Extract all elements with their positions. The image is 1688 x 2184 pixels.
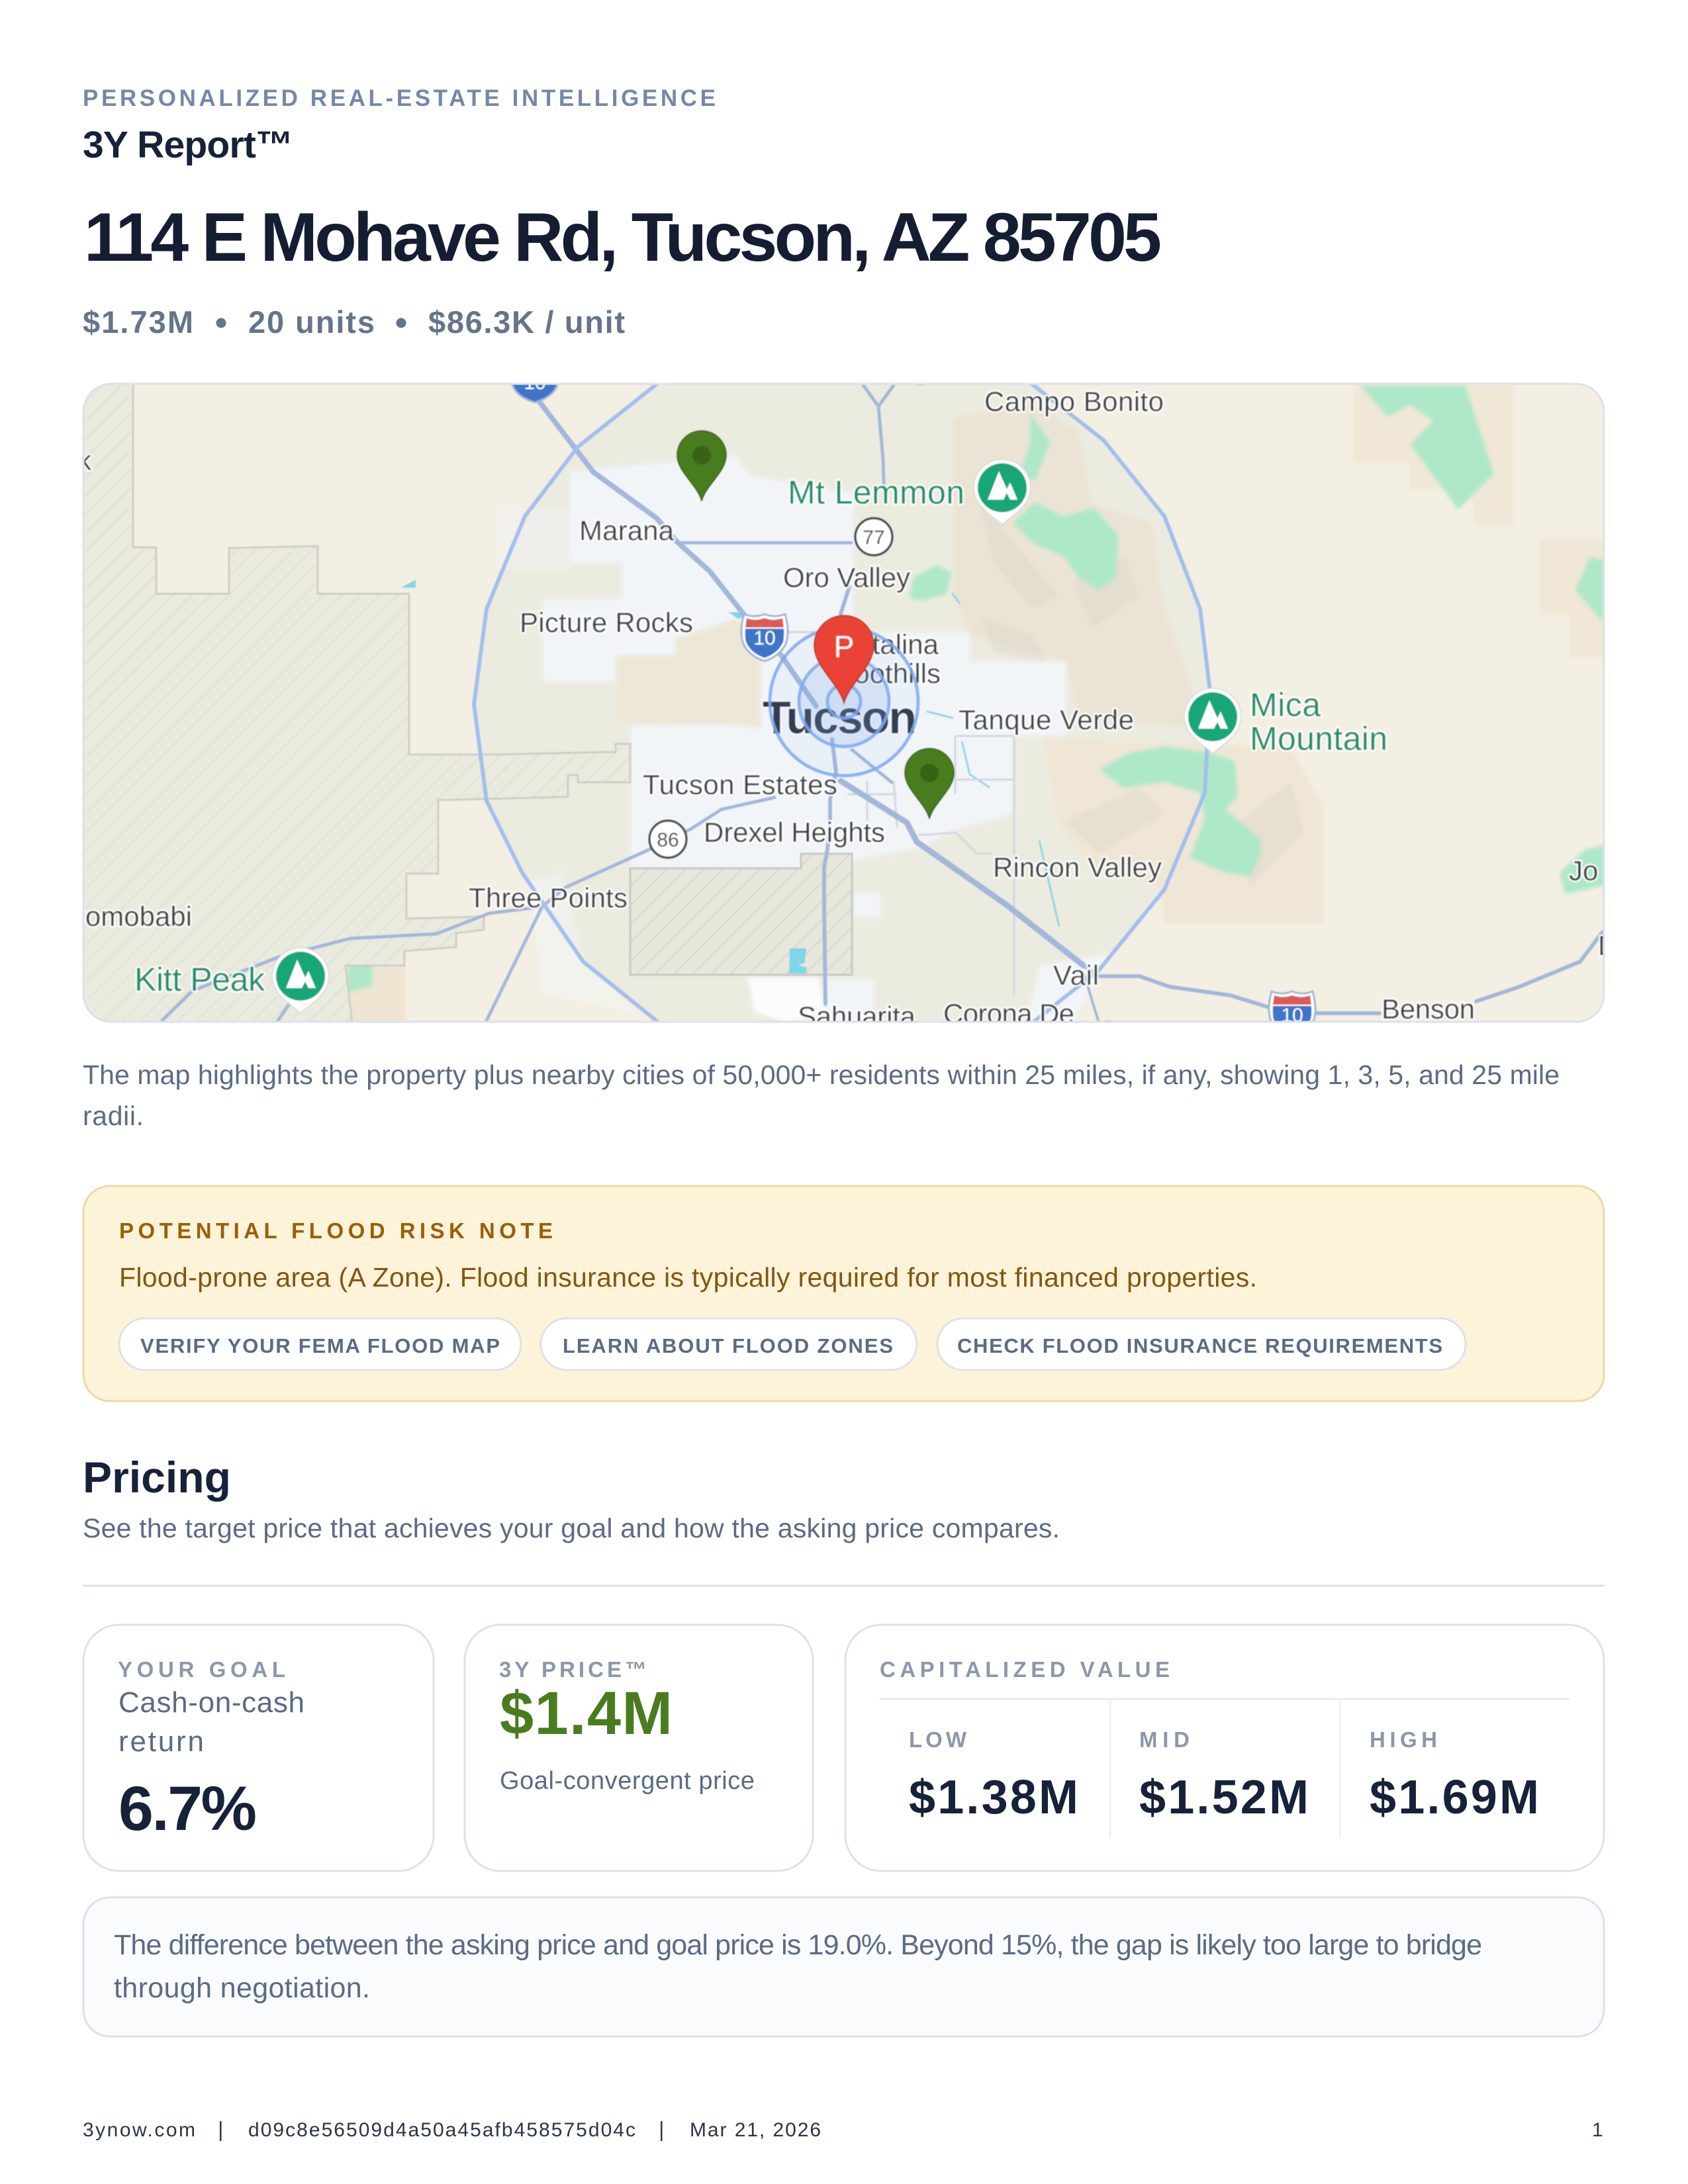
map place labels: k	[77, 445, 92, 476]
map place labels: Tucson Estates	[643, 769, 837, 800]
card: your goal: YOUR GOAL	[118, 1657, 285, 1682]
highway shield: I-10 north	[511, 385, 559, 404]
highway shield: I-10 center: 10	[753, 627, 776, 649]
summary stats line	[83, 304, 625, 340]
radius rings around property	[770, 627, 918, 776]
map place labels: Marana	[579, 515, 675, 546]
capitalized low: LOW	[909, 1727, 967, 1752]
map place labels: Mountain	[1250, 720, 1387, 757]
hatched: tribal land west	[83, 383, 630, 1023]
route shield: 86: 86	[657, 829, 679, 851]
route shield: 77: 77	[863, 527, 885, 549]
map place labels: Tanque Verde	[959, 704, 1134, 735]
summary stats line: $86.3K / unit	[428, 304, 625, 340]
capitalized high: $1.69M	[1370, 1771, 1539, 1824]
footer: Mar 21, 2026	[690, 2119, 821, 2141]
card: your goal	[83, 1625, 434, 1871]
hatched: reservation south of Tucson	[630, 854, 852, 975]
flood heading: POTENTIAL FLOOD RISK NOTE	[119, 1218, 553, 1243]
highway shield: I-10 east: 10	[1281, 1005, 1303, 1026]
section heading: pricing: Pricing	[83, 1453, 231, 1502]
pill: verify FEMA map: VERIFY YOUR FEMA FLOOD MAP	[140, 1334, 500, 1357]
pin: nearby city north	[677, 431, 726, 501]
highway shield: I-10 north: 10	[524, 372, 546, 394]
card: your goal: 6.7%	[118, 1774, 257, 1844]
card: 3Y price: Goal-convergent price	[500, 1767, 755, 1795]
map place labels: Rincon Valley	[993, 852, 1162, 883]
footer: 1	[1592, 2119, 1603, 2141]
pill: insurance requirements	[937, 1318, 1466, 1370]
map place labels: Tucson	[763, 692, 917, 743]
map place labels: Benson	[1382, 993, 1475, 1024]
poi marker: Mt Lemmon	[974, 459, 1031, 525]
capitalized high: HIGH	[1370, 1727, 1437, 1752]
map place labels: Jo	[1569, 855, 1598, 886]
capitalized high	[1370, 1727, 1539, 1824]
poi marker: Kitt Peak	[272, 948, 329, 1013]
map caption: radii.	[83, 1101, 144, 1131]
report name: 3Y Report™	[83, 124, 293, 166]
map place labels: Comobabi	[66, 901, 192, 932]
card: your goal: Cash-on-cash	[118, 1686, 305, 1719]
pill: verify FEMA map	[119, 1318, 521, 1370]
highway shield: I-10 center	[741, 614, 788, 661]
callout: price gap note: through negotiation.	[114, 1972, 370, 2004]
map place labels: Mica	[1250, 686, 1321, 723]
pin: nearby city south	[905, 749, 954, 819]
map place labels: Drexel Heights	[704, 817, 885, 848]
map place labels: Sahuarita	[798, 1001, 916, 1032]
minor roads	[761, 632, 1014, 995]
route shield: 77	[855, 518, 892, 555]
map place labels: Campo Bonito	[984, 386, 1164, 417]
capitalized mid	[1139, 1727, 1309, 1824]
panel: map	[66, 347, 1618, 1059]
map place labels: D	[1598, 930, 1618, 961]
map place labels: Catalina	[837, 629, 939, 660]
footer	[83, 2119, 1603, 2141]
map place labels	[66, 386, 1618, 1032]
map place labels: Kitt Peak	[134, 961, 265, 998]
capitalized mid: MID	[1139, 1727, 1190, 1752]
panel: flood risk note	[83, 1186, 1604, 1401]
major roads	[162, 385, 1603, 1023]
capitalized low	[909, 1727, 1078, 1824]
card: 3Y price: $1.4M	[500, 1680, 673, 1747]
map place labels: Oro Valley	[783, 562, 910, 593]
callout: price gap note: The difference between the asking price and goal price is 19.0%. Beyond 15%, the gap is likely too large to bridge	[114, 1929, 1482, 1961]
title: property address: 114 E Mohave Rd, Tucson, AZ 85705	[84, 199, 1162, 276]
capitalized low: $1.38M	[909, 1771, 1078, 1824]
callout: price gap note	[83, 1897, 1604, 2036]
card: capitalized value	[845, 1625, 1604, 1871]
map caption	[83, 1060, 1560, 1131]
highway shield: I-10 east	[1267, 990, 1317, 1021]
pill: insurance requirements: CHECK FLOOD INSURANCE REQUIREMENTS	[957, 1334, 1442, 1357]
map place labels: Three Points	[469, 882, 628, 913]
card: 3Y price	[465, 1625, 813, 1871]
map place labels: Foothills	[837, 658, 941, 689]
poi marker: Mica Mountain	[1184, 688, 1241, 754]
partial route shields at map edge	[915, 385, 1114, 1021]
map place labels: Corona De	[943, 998, 1074, 1029]
map place labels: Vail	[1053, 960, 1099, 991]
route shield: 86	[649, 821, 686, 858]
pill: learn flood zones	[541, 1318, 917, 1370]
section subheading: See the target price that achieves your goal and how the asking price compares.	[83, 1513, 1060, 1543]
25 mile radius ring	[474, 383, 1210, 1023]
card: 3Y price: 3Y PRICE™	[499, 1657, 647, 1682]
pin: property	[814, 615, 874, 703]
card: capitalized value: CAPITALIZED VALUE	[880, 1657, 1170, 1682]
footer: 3ynow.com	[83, 2119, 195, 2141]
map place labels: Picture Rocks	[520, 607, 693, 638]
flood body text: Flood-prone area (A Zone). Flood insurance is typically required for most financed properties.	[119, 1262, 1257, 1293]
pill: learn flood zones: LEARN ABOUT FLOOD ZONES	[563, 1334, 893, 1357]
eyebrow: personalized real-estate intelligence: PERSONALIZED REAL-ESTATE INTELLIGENCE	[83, 85, 716, 111]
summary stats line: 20 units	[248, 304, 375, 340]
pin: property: P	[834, 629, 854, 664]
card: your goal: return	[118, 1725, 204, 1758]
map place labels: Mt Lemmon	[788, 474, 964, 511]
map caption: The map highlights the property plus nearby cities of 50,000+ residents within 25 miles, if any, showing 1, 3, 5, and 25 mile	[83, 1060, 1560, 1090]
capitalized mid: $1.52M	[1139, 1771, 1309, 1824]
footer: d09c8e56509d4a50a45afb458575d04c	[248, 2119, 635, 2141]
summary stats line: $1.73M	[83, 304, 193, 340]
